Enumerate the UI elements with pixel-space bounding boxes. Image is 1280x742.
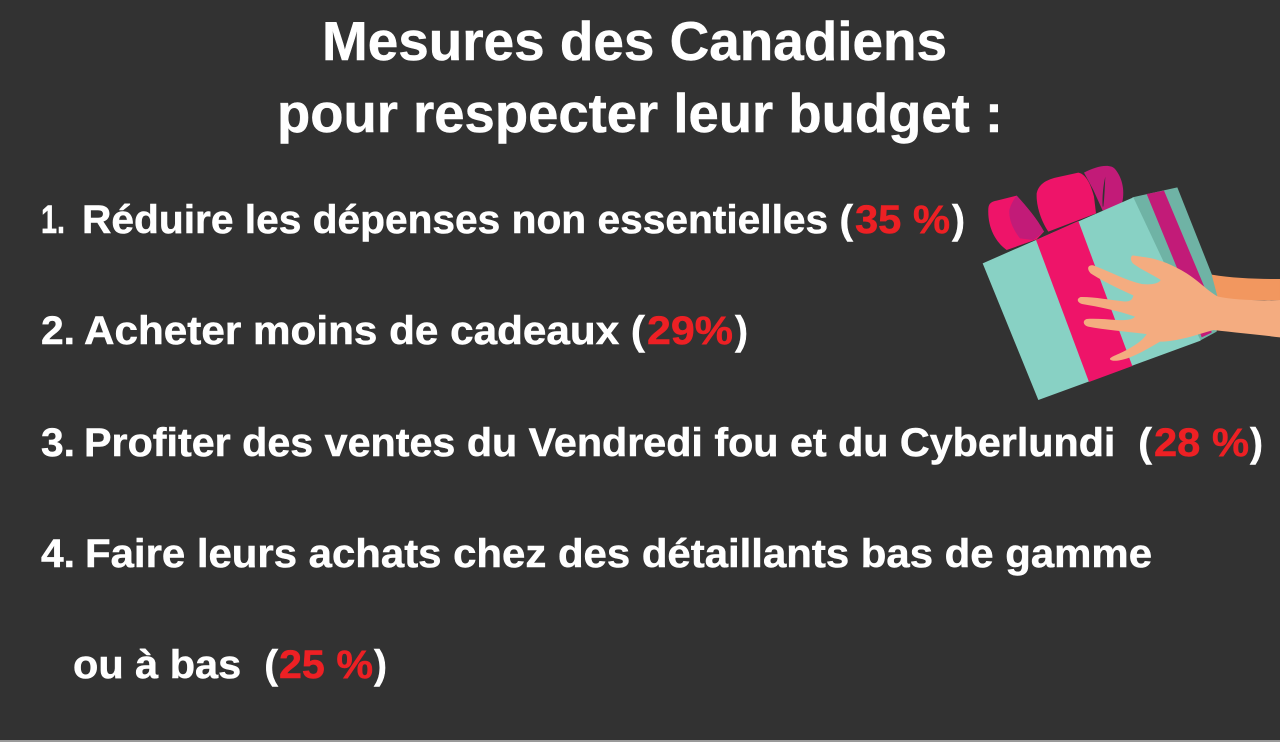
center bow loop xyxy=(1037,173,1096,232)
list item 3: 3. xyxy=(41,421,75,465)
box front face xyxy=(983,197,1201,400)
list item 4: ) xyxy=(374,643,387,687)
list item 1: 1. xyxy=(41,198,65,242)
list item 3: 28 % xyxy=(1154,421,1249,465)
list item 1: 35 % xyxy=(855,198,950,242)
left bow loop xyxy=(988,196,1044,250)
side ribbon xyxy=(1147,191,1212,337)
title xyxy=(277,10,1003,144)
list item 2: Acheter moins de cadeaux ( xyxy=(84,309,646,353)
list item 2: 29% xyxy=(647,309,733,353)
list item 4 xyxy=(41,532,1152,687)
icon: gift box held by a hand xyxy=(983,166,1280,400)
list item 2: 2. xyxy=(41,309,75,353)
title: Mesures des Canadiens xyxy=(322,10,947,72)
list item 4: 25 % xyxy=(279,643,373,687)
back bow loop xyxy=(1084,166,1123,211)
box side face xyxy=(1132,187,1220,341)
list item 1: Réduire les dépenses non essentielles ( xyxy=(82,198,854,242)
list item 3: Profiter des ventes du Vendredi fou et du Cyberlundi ( xyxy=(84,421,1153,465)
title: pour respecter leur budget : xyxy=(277,82,1003,144)
front ribbon xyxy=(1036,221,1132,382)
list item 4: Faire leurs achats chez des détaillants bas de gamme xyxy=(85,532,1152,576)
far arm xyxy=(1212,275,1280,300)
list item 3: ) xyxy=(1250,421,1263,465)
list item 4: ou à bas ( xyxy=(73,643,279,687)
hand xyxy=(1078,255,1280,361)
list item 1: ) xyxy=(952,198,965,242)
list item 2: ) xyxy=(735,309,748,353)
list item 4: 4. xyxy=(41,532,75,576)
